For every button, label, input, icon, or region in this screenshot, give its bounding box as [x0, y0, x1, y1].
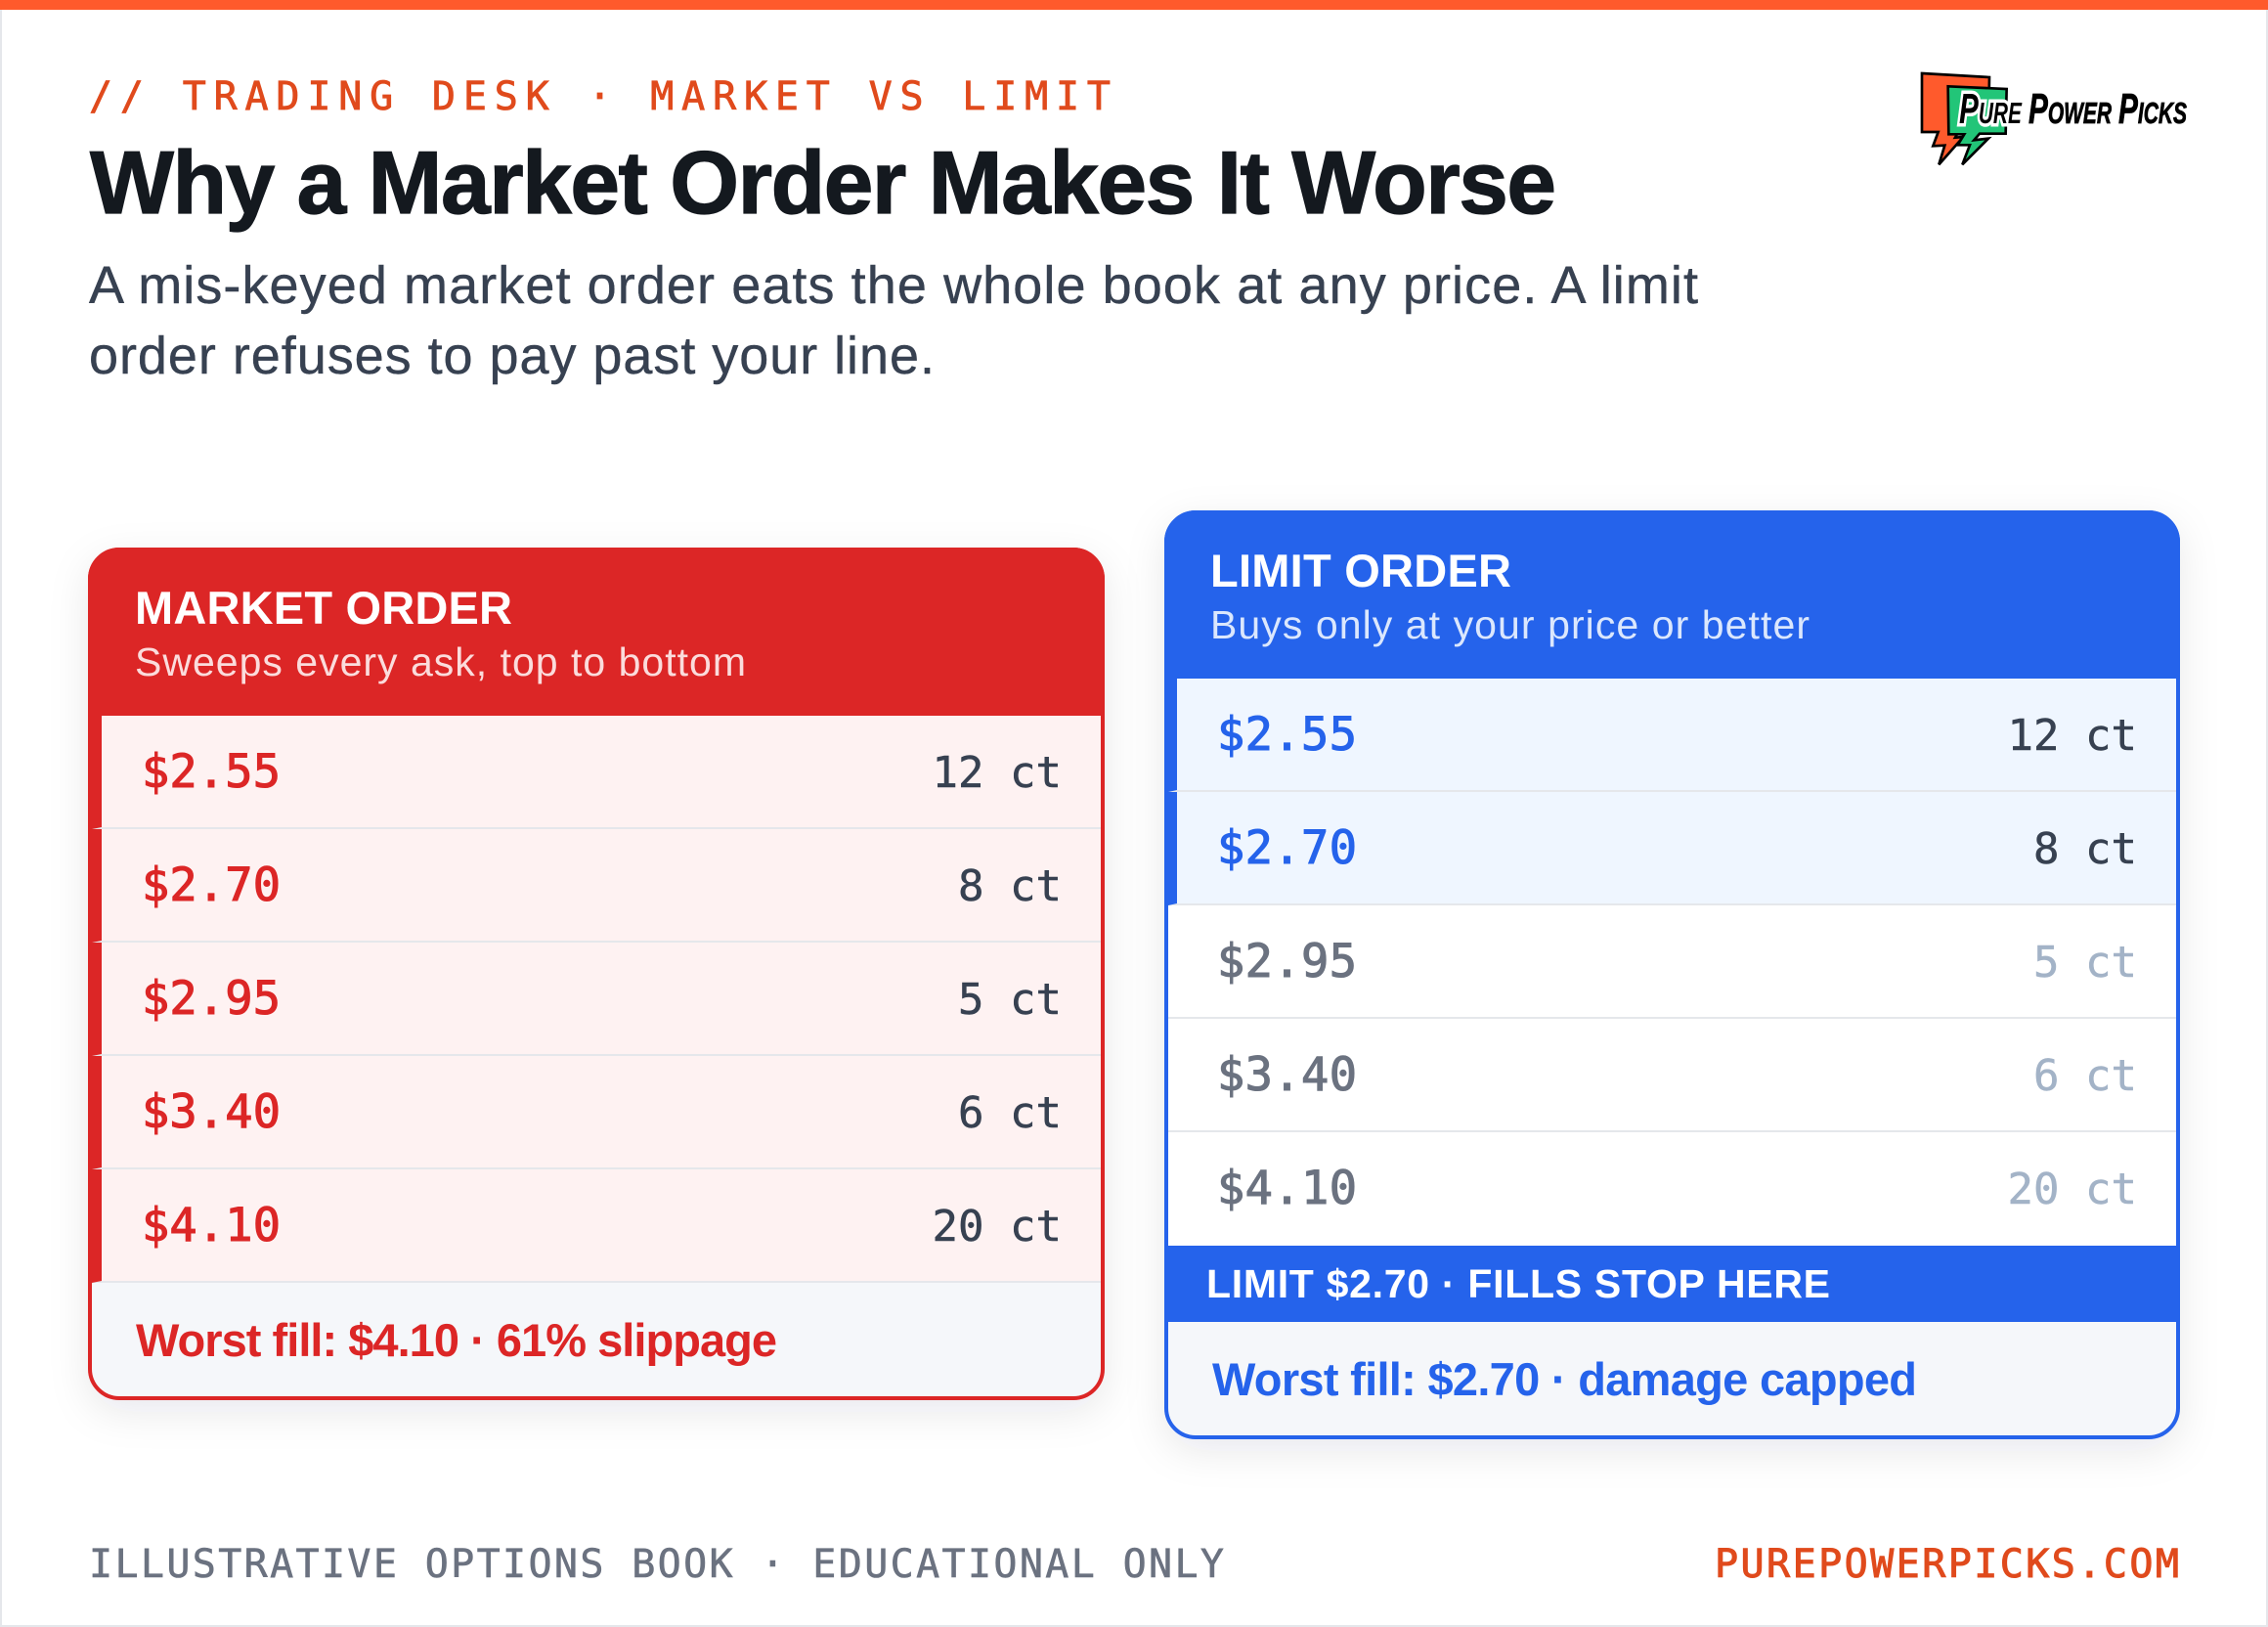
- market order book rows: [88, 716, 1101, 1283]
- market header: [88, 548, 1105, 716]
- market header: MARKET ORDER: [135, 582, 512, 634]
- logo wordmark: PICKS: [2118, 85, 2187, 133]
- limit order book rows: [1164, 679, 2176, 1246]
- row: $3.40: [1217, 1048, 2137, 1102]
- row: $2.95: $2.95: [142, 972, 281, 1026]
- footer note: ILLUSTRATIVE OPTIONS BOOK · EDUCATIONAL ONLY: [89, 1542, 1224, 1587]
- logo wordmark: [1959, 85, 2187, 133]
- row: $2.55: $2.55: [142, 745, 281, 799]
- row: $2.70: [142, 858, 1062, 912]
- limit line banner: [1164, 1246, 2180, 1322]
- limit footer callout: Worst fill: $2.70 · damage capped: [1212, 1353, 1917, 1405]
- icon: green speech bolt: [1948, 86, 2007, 164]
- row: $2.55: [1217, 708, 2137, 762]
- row: $2.95: 5 ct: [958, 975, 1062, 1025]
- subtitle: [89, 256, 1698, 385]
- row: $2.55: [142, 745, 1062, 799]
- row: $2.95: 5 ct: [2033, 938, 2137, 988]
- row: $3.40: [142, 1085, 1062, 1139]
- limit header: LIMIT ORDER: [1210, 545, 1511, 596]
- row: $2.70: 8 ct: [958, 861, 1062, 911]
- row: $2.70: $2.70: [142, 858, 281, 912]
- icon: orange speech bolt: [1922, 73, 1989, 164]
- subtitle: order refuses to pay past your line.: [89, 327, 935, 385]
- title: Why a Market Order Makes It Worse: [90, 134, 1556, 233]
- logo wordmark: PURE: [1959, 85, 2023, 133]
- row: $4.10: [142, 1199, 1062, 1253]
- logo: Pure Power Picks: [1922, 73, 2187, 164]
- logo wordmark: POWER: [2028, 85, 2112, 133]
- panel card: [90, 550, 1103, 1398]
- row: $2.95: [142, 972, 1062, 1026]
- limit header: [1164, 510, 2180, 679]
- row: $2.55: $2.55: [1217, 708, 1357, 762]
- limit header: Buys only at your price or better: [1210, 602, 1810, 647]
- panel: limit order: [1164, 510, 2180, 1437]
- row: $3.40: $3.40: [1217, 1048, 1357, 1102]
- top accent bar: [0, 0, 2268, 10]
- row: $2.95: [1217, 935, 2137, 989]
- row: $3.40: $3.40: [142, 1085, 281, 1139]
- row: $2.55: 12 ct: [933, 748, 1062, 798]
- row: $2.55: 12 ct: [2008, 711, 2137, 761]
- row: $2.70: 8 ct: [2033, 824, 2137, 874]
- market footer callout: Worst fill: $4.10 · 61% slippage: [136, 1314, 777, 1366]
- row: $4.10: $4.10: [142, 1199, 281, 1253]
- footer site url: PUREPOWERPICKS.COM: [1715, 1542, 2179, 1587]
- market header: Sweeps every ask, top to bottom: [135, 639, 746, 684]
- row: $4.10: 20 ct: [2008, 1165, 2137, 1214]
- row: $2.70: [1217, 821, 2137, 875]
- row: $4.10: $4.10: [1217, 1162, 1357, 1215]
- row: $2.95: $2.95: [1217, 935, 1357, 989]
- row: $3.40: 6 ct: [958, 1088, 1062, 1138]
- limit line banner: LIMIT $2.70 · FILLS STOP HERE: [1206, 1261, 1830, 1306]
- row: $3.40: 6 ct: [2033, 1051, 2137, 1101]
- row: $4.10: [1217, 1162, 2137, 1215]
- eyebrow: // TRADING DESK · MARKET VS LIMIT: [89, 74, 1111, 119]
- panel card: [1166, 512, 2178, 1437]
- subtitle: A mis-keyed market order eats the whole book at any price. A limit: [89, 256, 1698, 315]
- panel: market order: [88, 548, 1105, 1398]
- row: $2.70: $2.70: [1217, 821, 1357, 875]
- row: $4.10: 20 ct: [933, 1202, 1062, 1252]
